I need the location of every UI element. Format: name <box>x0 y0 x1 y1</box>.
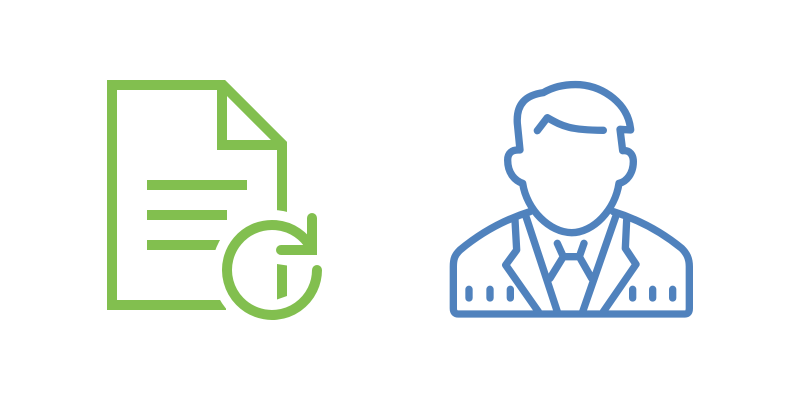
document text lines <box>147 185 247 245</box>
icon: businessman in suit <box>453 85 689 314</box>
left lapel <box>506 220 538 312</box>
document outline <box>112 85 282 305</box>
document lower edge segment <box>277 264 287 300</box>
left sleeve buttons <box>469 289 510 298</box>
refresh arrow head <box>281 218 312 250</box>
necktie <box>550 243 592 278</box>
right lapel <box>603 220 636 312</box>
document folded corner <box>222 88 282 145</box>
shirt collar lines <box>526 217 616 312</box>
suit body outline <box>453 212 689 314</box>
right sleeve buttons <box>633 289 673 298</box>
head and hair outline <box>508 85 633 233</box>
halo cut around refresh circle <box>212 210 332 330</box>
refresh circle arc <box>227 225 317 315</box>
hair fringe <box>537 118 603 131</box>
icon: document with refresh arrow <box>112 85 332 330</box>
